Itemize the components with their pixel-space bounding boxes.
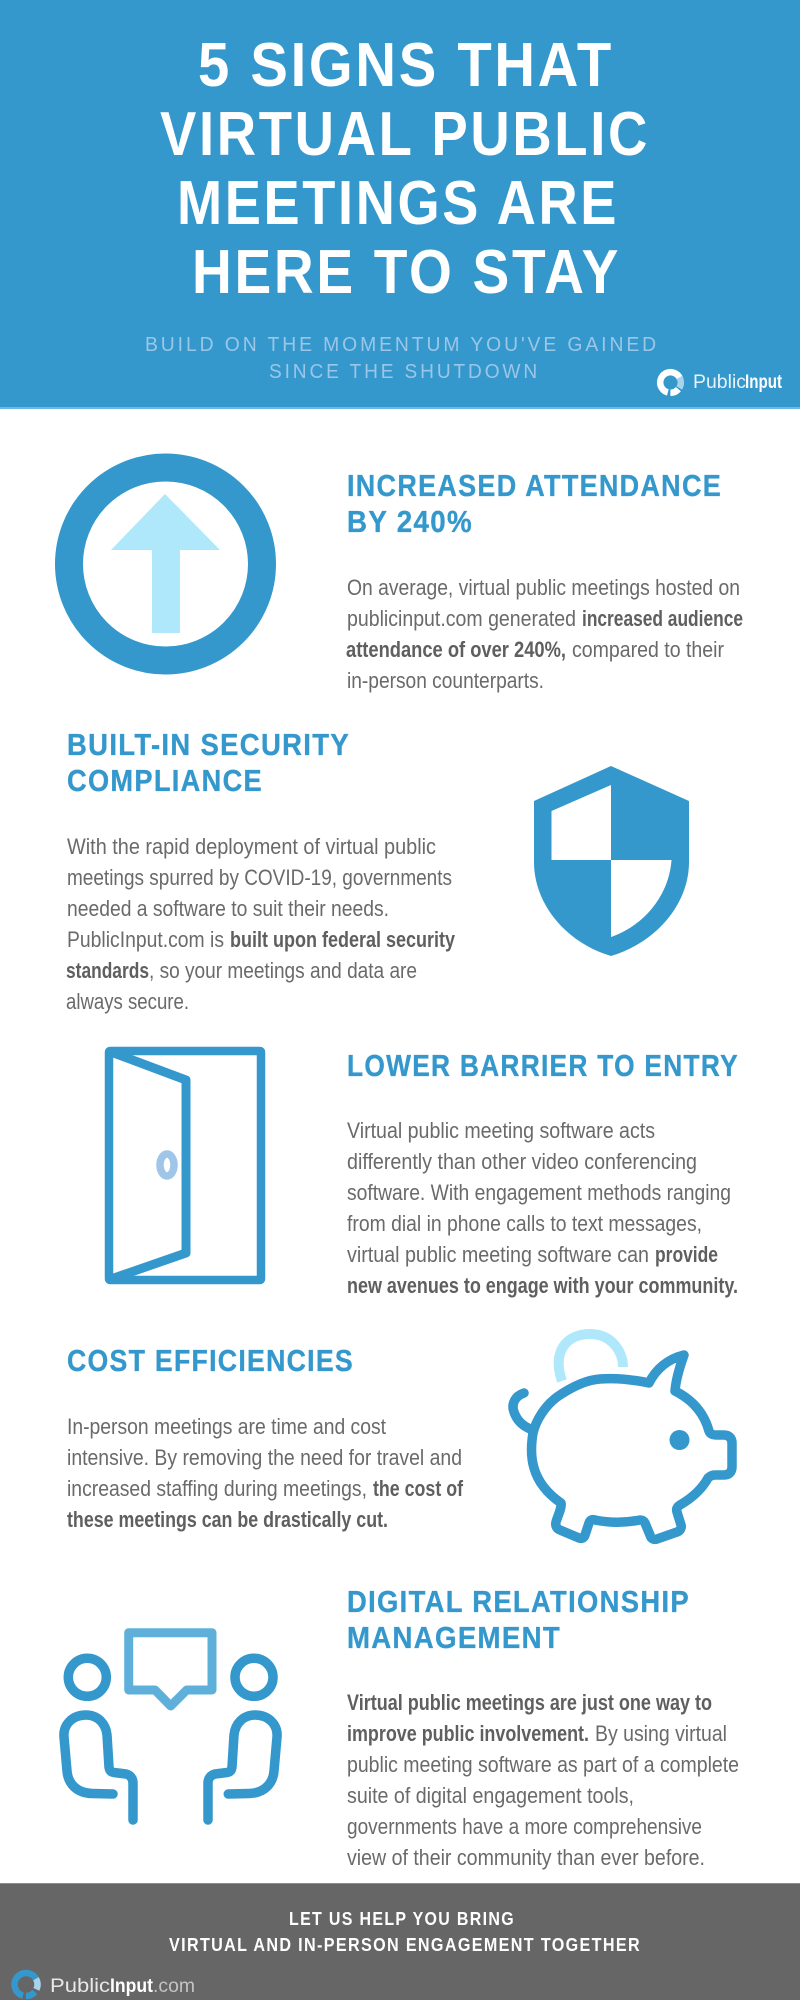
title: 5 SIGNS THAT xyxy=(198,31,614,100)
body text: public meeting software as part of a complete xyxy=(347,1752,739,1777)
body text: the cost of xyxy=(373,1476,464,1501)
body text: meetings spurred by COVID-19, governments xyxy=(67,865,452,890)
heading: COST EFFICIENCIES xyxy=(67,1343,354,1378)
body text: in-person counterparts. xyxy=(347,668,544,693)
panel: increased attendance xyxy=(69,468,743,693)
logo: PublicInput.com footer: .com xyxy=(153,1976,195,1997)
heading xyxy=(347,468,722,539)
body text: standards xyxy=(66,958,149,983)
body text: attendance of over 240%, xyxy=(346,637,566,662)
body text: built upon federal security xyxy=(230,927,456,952)
logo: PublicInput header: Input xyxy=(745,372,783,393)
call to action: LET US HELP YOU BRING xyxy=(289,1909,515,1929)
body text xyxy=(347,1118,738,1298)
body text: PublicInput.com is xyxy=(67,927,224,952)
speech bubble xyxy=(129,1633,212,1706)
body text: publicinput.com generated xyxy=(347,606,576,631)
body text xyxy=(66,834,456,1014)
body text: With the rapid deployment of virtual public xyxy=(67,834,436,859)
body text: software. With engagement methods ranging xyxy=(347,1180,731,1205)
body text: always secure. xyxy=(66,989,189,1014)
logo: PublicInput header: Public xyxy=(693,372,746,393)
body text: virtual public meeting software can xyxy=(347,1242,649,1267)
left person xyxy=(64,1658,133,1820)
icon: shield xyxy=(534,766,689,956)
body text: increased audience xyxy=(582,606,743,631)
body text: increased staffing during meetings, xyxy=(67,1476,367,1501)
logo: PublicInput.com footer: Input xyxy=(110,1976,154,1997)
body text: view of their community than ever before. xyxy=(347,1845,705,1870)
icon: open door xyxy=(109,1051,261,1280)
body text: On average, virtual public meetings hosted on xyxy=(347,575,740,600)
door knob xyxy=(160,1154,174,1176)
body text: By using virtual xyxy=(595,1721,727,1746)
subtitle: SINCE THE SHUTDOWN xyxy=(269,361,540,383)
body text: needed a software to suit their needs. xyxy=(67,896,389,921)
body text: suite of digital engagement tools, xyxy=(347,1783,634,1808)
subtitle: BUILD ON THE MOMENTUM YOU'VE GAINED xyxy=(145,334,659,356)
header banner xyxy=(0,0,800,409)
body text: improve public involvement. xyxy=(347,1721,589,1746)
icon: piggy bank xyxy=(513,1334,732,1539)
icon: up arrow in circle xyxy=(69,468,262,660)
title: MEETINGS ARE xyxy=(177,169,619,238)
body text: Virtual public meetings are just one way to xyxy=(347,1690,712,1715)
body text: provide xyxy=(655,1242,718,1267)
logo: PublicInput.com footer xyxy=(10,1968,195,2000)
call to action xyxy=(169,1909,641,1955)
heading: BY 240% xyxy=(347,504,473,539)
body text: , so your meetings and data are xyxy=(149,958,417,983)
heading: DIGITAL RELATIONSHIP xyxy=(347,1584,690,1619)
call to action: VIRTUAL AND IN-PERSON ENGAGEMENT TOGETHER xyxy=(169,1935,641,1955)
coin xyxy=(559,1334,623,1381)
title xyxy=(160,31,650,307)
heading: MANAGEMENT xyxy=(347,1620,561,1655)
body text: from dial in phone calls to text messages, xyxy=(347,1211,702,1236)
panel: cost efficiencies xyxy=(67,1334,732,1539)
heading: COMPLIANCE xyxy=(67,763,263,798)
right person xyxy=(208,1658,277,1820)
body text xyxy=(347,1690,739,1870)
heading: BUILT-IN SECURITY xyxy=(67,727,350,762)
logo: PublicInput header xyxy=(656,368,783,397)
title: VIRTUAL PUBLIC xyxy=(160,100,650,169)
footer banner xyxy=(0,1883,800,2000)
body text: In-person meetings are time and cost xyxy=(67,1414,386,1439)
body text: these meetings can be drastically cut. xyxy=(67,1507,388,1532)
panel: digital relationship management xyxy=(64,1584,739,1870)
tail xyxy=(513,1393,533,1430)
body text xyxy=(67,1414,464,1532)
title: HERE TO STAY xyxy=(192,238,621,307)
eye xyxy=(670,1430,690,1450)
body text: intensive. By removing the need for travel and xyxy=(67,1445,462,1470)
logo: PublicInput.com footer: Public xyxy=(50,1976,110,1997)
subtitle xyxy=(145,334,659,383)
heading xyxy=(67,727,350,798)
body text: differently than other video conferencing xyxy=(347,1149,697,1174)
heading: LOWER BARRIER TO ENTRY xyxy=(347,1048,739,1083)
body text: compared to their xyxy=(572,637,724,662)
heading: INCREASED ATTENDANCE xyxy=(347,468,722,503)
body text xyxy=(346,575,743,693)
pig body xyxy=(532,1355,732,1539)
icon: two people talking xyxy=(64,1633,277,1820)
heading xyxy=(347,1584,690,1655)
panel: lower barrier to entry xyxy=(109,1048,739,1298)
body text: Virtual public meeting software acts xyxy=(347,1118,655,1143)
body text: governments have a more comprehensive xyxy=(347,1814,702,1839)
panel: security compliance xyxy=(66,727,689,1014)
